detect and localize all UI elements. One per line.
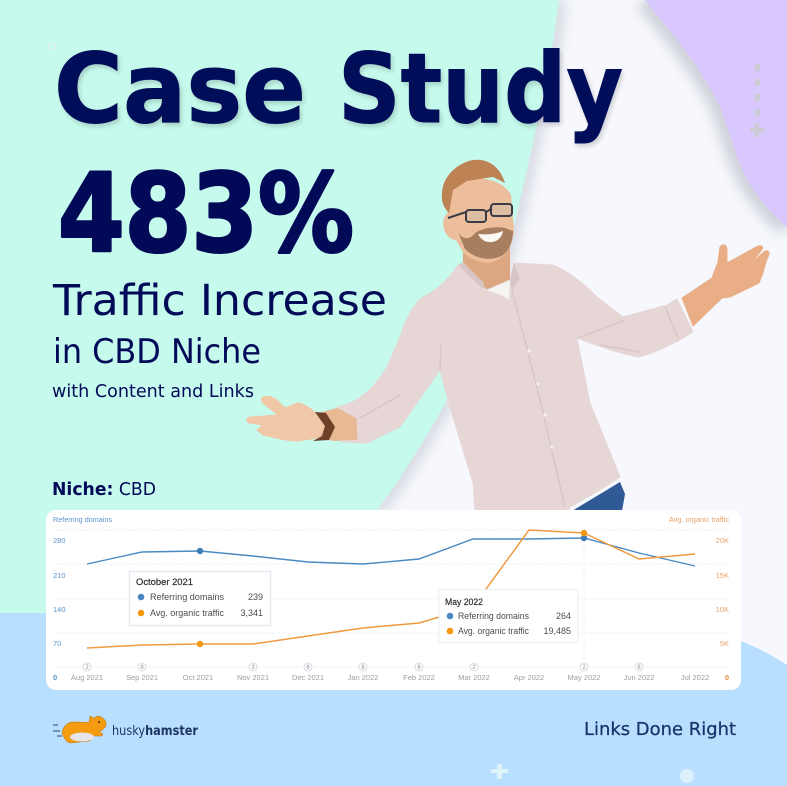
decoration: small ring: [49, 43, 55, 49]
data points: [197, 530, 587, 647]
title: Study: [338, 33, 623, 145]
annotation numbers: 8: [637, 665, 641, 671]
annotation numbers: 2: [85, 665, 89, 671]
left axis: Referring domains: [53, 515, 112, 524]
right axis: 10K: [716, 605, 729, 614]
tooltip: October 2021: Referring domains: [150, 592, 224, 602]
grid lines: [53, 530, 730, 667]
month labels: [71, 673, 709, 682]
line: referring domains: [87, 538, 695, 566]
month labels: Oct 2021: [183, 673, 213, 682]
left forearm: [318, 408, 358, 441]
shirt buttons: [527, 349, 554, 449]
logo icon: hamster: [53, 716, 106, 743]
neck: [463, 235, 510, 292]
left axis: 70: [53, 639, 61, 648]
head: [443, 179, 514, 263]
tooltip: October 2021: 239: [248, 592, 263, 602]
subtitle: niche: in CBD Niche: [53, 332, 261, 372]
shirt folds: [360, 290, 678, 507]
annotation numbers: 2: [582, 665, 586, 671]
month labels: Dec 2021: [292, 673, 324, 682]
tooltip: October 2021: [130, 572, 270, 626]
tooltip: May 2022: 19,485: [543, 626, 571, 636]
torso and sleeves: [337, 263, 693, 511]
left axis: 140: [53, 605, 66, 614]
background: lavender corner: [645, 0, 787, 227]
left axis: [53, 515, 112, 682]
title: [54, 33, 623, 145]
annotation numbers: 6: [417, 665, 421, 671]
month labels: Jan 2022: [348, 673, 378, 682]
chart card: [46, 510, 741, 690]
right axis: 5K: [720, 639, 729, 648]
jeans: [572, 482, 625, 511]
month labels: May 2022: [568, 673, 600, 682]
month labels: Feb 2022: [403, 673, 435, 682]
background: blue footer: [0, 613, 787, 786]
month labels: Jul 2022: [681, 673, 709, 682]
decoration: footer plus: [491, 764, 508, 779]
decoration: dots and plus on lavender: [750, 64, 764, 137]
right axis: Avg. organic traffic: [669, 515, 729, 524]
month labels: Apr 2022: [514, 673, 544, 682]
right axis: 0: [725, 673, 729, 682]
subtitle: traffic increase: Traffic Increase: [52, 276, 387, 326]
tooltip: May 2022: 264: [556, 611, 571, 621]
right forearm and hand: [682, 245, 769, 326]
tooltip: May 2022: [439, 590, 578, 642]
tooltip: May 2022: Avg. organic traffic: [458, 626, 529, 636]
left hand: [247, 396, 324, 441]
logo wordmark: huskyhamster: [112, 724, 199, 739]
person: [247, 160, 769, 511]
tooltip: October 2021: 3,341: [240, 608, 263, 618]
annotation numbers: 6: [306, 665, 310, 671]
right axis: 20K: [716, 536, 729, 545]
beard: [458, 227, 513, 259]
decoration: footer circle: [680, 769, 694, 783]
smile: [478, 231, 503, 242]
watch: [313, 412, 335, 441]
annotation markers: [83, 663, 643, 671]
subtitle: method: with Content and Links: [52, 381, 254, 402]
collar: [458, 262, 520, 290]
annotation numbers: [85, 665, 641, 671]
tooltip: May 2022: Referring domains: [458, 611, 529, 621]
annotation numbers: 8: [361, 665, 365, 671]
month labels: Nov 2021: [237, 673, 269, 682]
annotation numbers: 8: [140, 665, 144, 671]
niche label: Niche: CBD: [52, 479, 156, 500]
hair: [442, 160, 505, 213]
right axis: 15K: [716, 571, 729, 580]
tooltip: October 2021: October 2021: [136, 577, 193, 587]
month labels: Jun 2022: [624, 673, 654, 682]
line: organic traffic: [87, 530, 695, 648]
glasses: [448, 204, 512, 222]
background: mint shape: [0, 0, 559, 613]
annotation numbers: 2: [472, 665, 476, 671]
headline number: 483%: [58, 152, 354, 277]
month labels: Sep 2021: [126, 673, 158, 682]
month labels: Aug 2021: [71, 673, 103, 682]
annotation numbers: 3: [251, 665, 255, 671]
right axis: [669, 515, 729, 682]
tagline: Links Done Right: [584, 719, 736, 740]
title: Case: [54, 33, 306, 145]
left axis: 280: [53, 536, 66, 545]
left axis: 210: [53, 571, 66, 580]
month labels: Mar 2022: [458, 673, 490, 682]
t-shirt: [487, 280, 510, 300]
tooltip: May 2022: May 2022: [445, 597, 483, 607]
tooltip: October 2021: Avg. organic traffic: [150, 608, 224, 618]
left axis: 0: [53, 673, 57, 682]
